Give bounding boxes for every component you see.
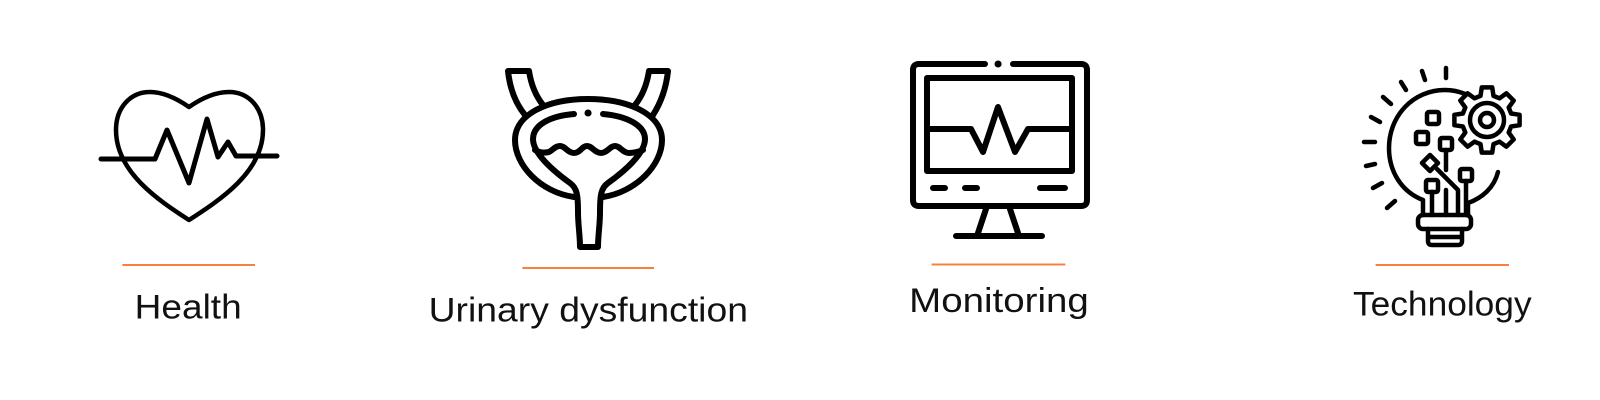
divider: monitoring	[932, 264, 1065, 266]
label: monitoring: Monitoring	[909, 282, 1089, 320]
label: health: Health	[135, 288, 242, 326]
icon: monitor	[913, 64, 1087, 236]
icon: heart with pulse	[101, 92, 277, 220]
divider: urinary	[522, 267, 654, 269]
label: urinary dysfunction: Urinary dysfunction	[429, 291, 748, 329]
divider: technology	[1376, 264, 1509, 266]
divider: health	[122, 264, 255, 266]
icon: bladder	[508, 71, 668, 247]
icon: lightbulb with gear	[1364, 68, 1520, 245]
label: technology: Technology	[1353, 285, 1532, 323]
